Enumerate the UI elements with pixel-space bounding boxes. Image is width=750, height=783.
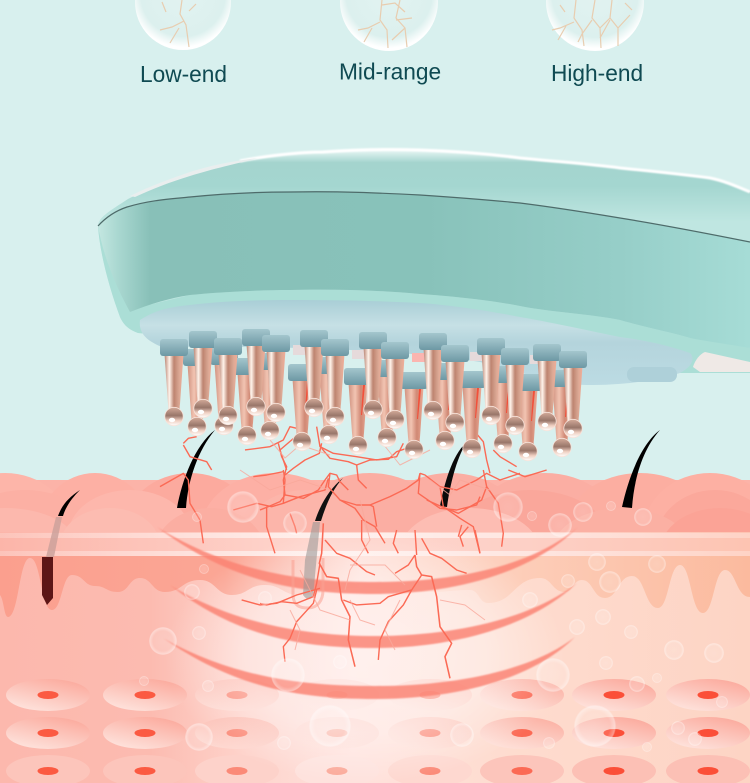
label: Low-end: Low-end	[140, 61, 227, 87]
label: High-end: High-end	[551, 60, 643, 86]
icon: mid-range sphere	[340, 0, 438, 51]
central light glow	[165, 530, 565, 783]
panel: skin cross-section	[0, 427, 750, 783]
label: Mid-range: Mid-range	[339, 58, 441, 84]
main body panel	[98, 192, 750, 348]
lower lip and left side of body	[98, 226, 750, 373]
brush silhouette and upper surface	[98, 149, 750, 373]
surface band	[0, 532, 750, 556]
handle white window	[693, 352, 750, 372]
display strip on top	[130, 158, 258, 197]
blood vessel network	[160, 427, 547, 678]
plate button	[627, 367, 677, 382]
seam line	[98, 192, 750, 242]
skin cells	[6, 679, 750, 783]
front row pins	[160, 329, 587, 438]
bubbles	[139, 491, 728, 752]
skin surface bumps	[0, 473, 750, 598]
hair follicles	[42, 430, 660, 608]
bristle plate	[140, 300, 693, 385]
light waves	[157, 527, 578, 699]
top edge highlight	[240, 149, 750, 192]
panel: hair density comparison	[135, 0, 644, 87]
dermis layer	[0, 555, 750, 783]
brush device	[98, 149, 750, 461]
icon: high-end sphere	[546, 0, 644, 51]
icon: low-end sphere	[135, 0, 231, 50]
back row pins	[183, 348, 576, 461]
epidermis wavy layer	[0, 556, 750, 617]
indicator lights	[293, 345, 545, 364]
